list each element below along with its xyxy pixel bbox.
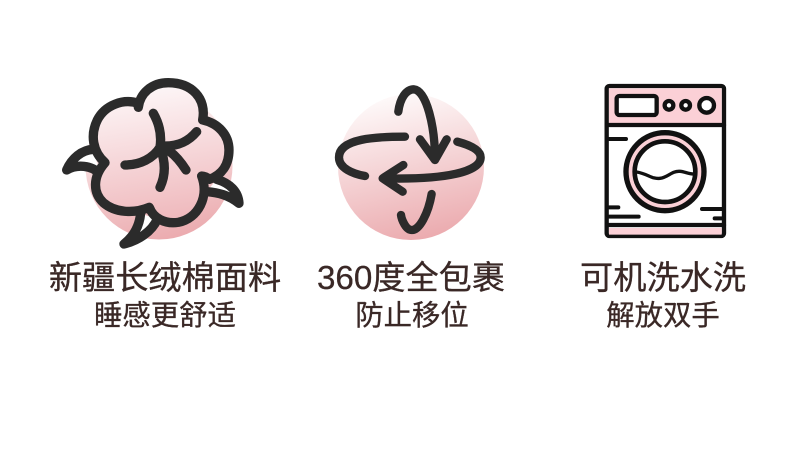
cotton leaves: [67, 149, 239, 244]
text block: washing subheading: 解放双手: [606, 300, 720, 332]
body detail lines: [609, 139, 722, 218]
machine body: [607, 86, 724, 236]
control panel: [609, 88, 722, 124]
cotton inner seams: [125, 113, 197, 187]
icon: cotton boll: [67, 83, 239, 244]
text block: wrap heading: 360度全包裹: [317, 260, 505, 297]
vertical arrow bottom: [401, 194, 432, 230]
door glass: [635, 141, 695, 202]
pink circle behind arrows: [338, 94, 484, 240]
bottom pink band: [609, 228, 722, 235]
vertical arrow top: [398, 89, 447, 160]
horizontal ring with arrow: [339, 137, 481, 192]
icon: washing machine: [607, 86, 724, 236]
pink circle behind cotton: [86, 92, 232, 240]
display: [617, 96, 657, 115]
text block: cotton subheading: 睡感更舒适: [94, 300, 236, 332]
text block: cotton heading: 新疆长绒棉面料: [49, 260, 281, 297]
door outer ring: [626, 133, 704, 211]
text block: wrap subheading: 防止移位: [355, 300, 469, 332]
water wave: [637, 171, 694, 178]
cotton outline: [93, 83, 229, 223]
text block: washing heading: 可机洗水洗: [580, 260, 746, 297]
knobs: [665, 101, 673, 110]
icon: 360 wrap arrows: [338, 89, 484, 240]
